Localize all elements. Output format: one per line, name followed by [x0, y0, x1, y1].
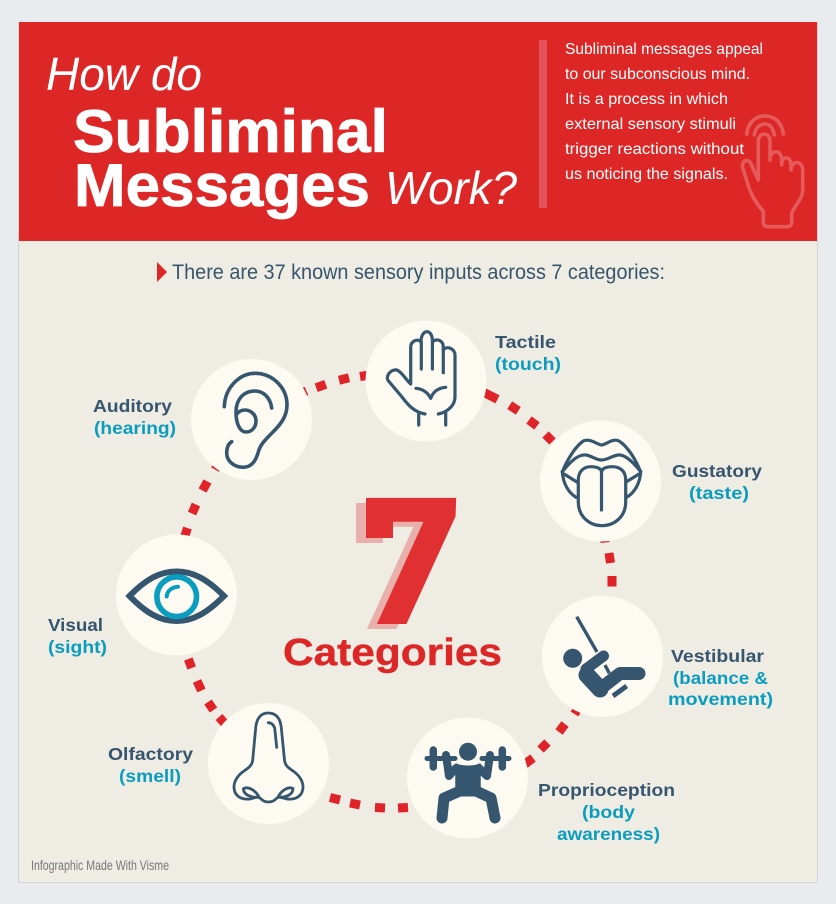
intro text	[565, 41, 763, 183]
intro text: trigger reactions without	[565, 141, 745, 158]
node: visual	[48, 534, 237, 657]
intro text: us noticing the signals.	[565, 166, 728, 183]
intro text: Subliminal messages appeal	[565, 41, 763, 58]
label: (taste)	[689, 483, 749, 503]
label: Visual	[48, 615, 103, 635]
icon: ear	[224, 373, 287, 467]
icon: swing	[563, 617, 639, 696]
intro text: external sensory stimuli	[565, 116, 736, 133]
icon: nose	[234, 713, 303, 802]
label: (sight)	[48, 637, 107, 657]
title: How do	[46, 48, 202, 100]
label: Tactile	[495, 332, 556, 352]
label	[538, 780, 675, 844]
label: (balance &	[673, 668, 768, 688]
subtitle: There are 37 known sensory inputs across 7 categories:	[172, 261, 665, 284]
big number 7 shadow: 7	[342, 470, 460, 670]
label	[48, 615, 107, 657]
label: Olfactory	[108, 744, 193, 764]
title: Messages	[74, 152, 370, 219]
node: gustatory	[540, 420, 762, 542]
label: awareness)	[557, 824, 660, 844]
label: Gustatory	[672, 461, 762, 481]
label: Proprioception	[538, 780, 675, 800]
node: proprioception	[407, 718, 675, 844]
intro text: to our subconscious mind.	[565, 66, 750, 83]
center label: Categories: Categories	[283, 632, 502, 674]
title	[46, 48, 517, 219]
icon: hand	[387, 332, 455, 425]
label	[108, 744, 193, 786]
label	[495, 332, 561, 374]
node: olfactory	[108, 703, 329, 824]
title: Work?	[385, 162, 517, 214]
label: Auditory	[93, 396, 172, 416]
intro text: It is a process in which	[565, 91, 728, 108]
label	[93, 396, 176, 438]
icon: weightlifter	[427, 743, 509, 818]
label: Vestibular	[671, 646, 764, 666]
node: tactile	[366, 320, 561, 442]
icon: pointing hand	[742, 116, 803, 227]
node: auditory	[93, 359, 312, 480]
dashed ring	[184, 375, 612, 808]
icon: tongue	[562, 440, 641, 526]
footer credit: Infographic Made With Visme	[31, 857, 169, 873]
panel: red header	[19, 22, 817, 241]
big number 7: 7	[352, 465, 470, 665]
node: vestibular	[542, 596, 773, 717]
divider bar	[539, 40, 547, 208]
label: movement)	[668, 689, 773, 709]
icon: eye	[130, 572, 224, 621]
label: (smell)	[119, 766, 181, 786]
label: (touch)	[495, 354, 561, 374]
label	[668, 646, 773, 709]
label: (hearing)	[94, 418, 176, 438]
title: Subliminal	[73, 98, 388, 165]
label	[672, 461, 762, 503]
label: (body	[582, 802, 635, 822]
